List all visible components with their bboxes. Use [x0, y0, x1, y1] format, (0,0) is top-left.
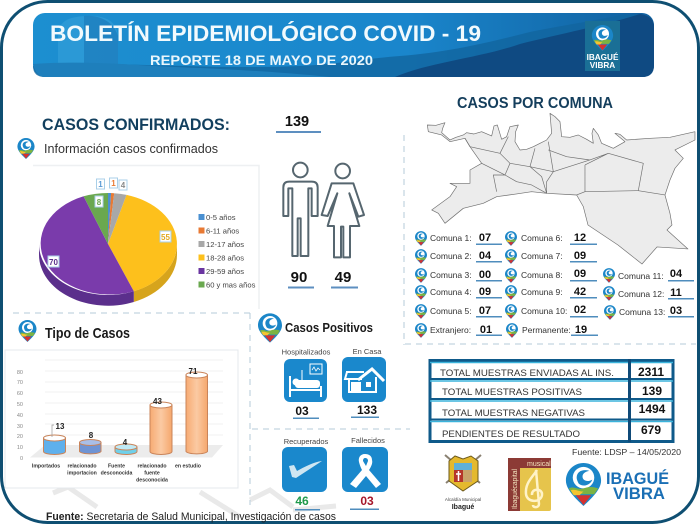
comuna values: 09 [479, 286, 491, 298]
comuna labels: Comuna 6: [521, 233, 563, 243]
y axis: 70 [17, 380, 23, 386]
y axis: 40 [17, 413, 23, 419]
info casos confirmados text: Información casos confirmados [44, 142, 218, 156]
category labels: Fuente [108, 464, 125, 470]
banner decoration [58, 16, 118, 77]
comuna values: 01 [480, 324, 492, 336]
logo: alcaldia ibague: Ibagué [452, 504, 474, 511]
title: BOLETÍN EPIDEMIOLÓGICO COVID - 19 [50, 21, 481, 46]
y axis [17, 370, 23, 462]
banner logo: VIBRA [590, 61, 615, 70]
pie legend [198, 213, 256, 290]
female count: 49 [335, 269, 351, 286]
tile: hospitalizados: 03 [295, 404, 309, 418]
category labels [32, 464, 201, 484]
comuna values: 07 [479, 305, 491, 317]
comuna values: 19 [575, 324, 587, 336]
table labels [440, 368, 614, 439]
value labels: 13 [56, 422, 65, 431]
comuna labels: Permanente: [522, 325, 571, 335]
logo: alcaldia ibague [445, 455, 481, 511]
icon: people figures [283, 163, 364, 257]
tile: fallecidos [342, 436, 388, 510]
banner [33, 13, 654, 77]
table values [638, 365, 666, 437]
panel: cylinder chart [5, 350, 238, 488]
category labels: Importados [32, 464, 60, 470]
logo: ibague vibra [566, 463, 669, 506]
source note: Fuente: Secretaria de Salud Municipal, Investigación de casos [46, 511, 336, 523]
pie data labels: 70 [49, 258, 58, 267]
comuna values: 02 [574, 304, 586, 316]
pie legend: 18-28 años [206, 254, 244, 262]
pie legend: 29-59 años [206, 267, 244, 276]
tile: fallecidos: 03 [360, 494, 374, 508]
pie data labels: 8 [97, 198, 102, 207]
logo: alcaldia ibague: Alcaldía Municipal [445, 497, 481, 502]
heading: casos confirmados: CASOS CONFIRMADOS: [42, 115, 230, 134]
category labels: relacionado [137, 464, 167, 470]
comuna labels: Comuna 8: [521, 270, 563, 280]
banner logo: IBAGUÉ [587, 52, 619, 62]
pie slice: 12-17 [108, 193, 126, 244]
y axis: 60 [17, 391, 23, 397]
table labels: TOTAL MUESTRAS NEGATIVAS [442, 408, 585, 418]
cylinder: fuente desconocida [115, 444, 137, 454]
pie slice: 0-5 [108, 193, 111, 244]
category labels: desconocida [101, 470, 132, 476]
table labels: TOTAL MUESTRAS ENVIADAS AL INS. [440, 368, 614, 378]
male count: 90 [291, 269, 307, 286]
y axis: 10 [17, 445, 23, 451]
pie data labels: 4 [121, 181, 126, 190]
logo: ibague vibra: IBAGUÉ [606, 469, 669, 488]
y axis: 80 [17, 370, 23, 376]
table values: 679 [641, 423, 661, 437]
logo: musical: Ibaguécapital [512, 469, 519, 509]
icon: hospital bed [290, 364, 322, 397]
y axis: 50 [17, 402, 23, 408]
icon: house [345, 369, 384, 392]
comuna labels: Comuna 3: [430, 270, 472, 280]
pie data labels [48, 178, 171, 267]
background watermark stripes [53, 487, 336, 517]
treble clef mark [526, 470, 542, 507]
heading: casos positivos: Casos Positivos [285, 321, 373, 335]
subtitle: REPORTE 18 DE MAYO DE 2020 [150, 52, 373, 68]
tile: hospitalizados: Hospitalizados [282, 348, 331, 356]
pie slice: 29-59 [41, 196, 134, 295]
comuna labels: Comuna 12: [618, 289, 664, 299]
table: muestras [430, 359, 673, 442]
tile: en casa: 133 [357, 403, 377, 417]
comuna labels: Comuna 1: [430, 233, 472, 243]
cylinder: importados [44, 435, 66, 454]
icon: pin info [17, 138, 35, 159]
comuna values: 12 [574, 232, 586, 244]
value labels: 71 [189, 367, 198, 376]
value labels: 8 [89, 431, 94, 440]
pie data labels: 1 [111, 179, 116, 188]
y axis: 20 [17, 434, 23, 440]
comuna values: 42 [574, 286, 586, 298]
cylinder: relacionado importacion [80, 440, 101, 454]
value labels [52, 367, 198, 447]
y axis: 0 [20, 456, 23, 462]
category labels: fuente [144, 470, 160, 476]
logo: musical [508, 458, 551, 511]
comuna values: 03 [670, 305, 682, 317]
comuna labels: Comuna 2: [430, 251, 472, 261]
logo: ibague vibra: VIBRA [613, 484, 665, 503]
comuna labels: Comuna 13: [619, 307, 665, 317]
comuna labels: Comuna 11: [618, 271, 664, 281]
table labels: PENDIENTES DE RESULTADO [442, 429, 580, 439]
category labels: importacion [67, 470, 97, 476]
comuna labels: Comuna 5: [430, 306, 472, 316]
total confirmed number [276, 114, 321, 133]
comuna values: 07 [479, 232, 491, 244]
comuna labels: Comuna 9: [521, 287, 563, 297]
source: LDSP: Fuente: LDSP – 14/05/2020 [572, 447, 681, 457]
icon: ribbon [350, 454, 381, 488]
icon: pin tipo de casos [18, 320, 36, 342]
icon: pin casos positivos [258, 313, 282, 343]
tile: recuperados: Recuperados [284, 437, 329, 446]
pie legend: 0-5 años [206, 213, 236, 222]
map of comunas [427, 113, 695, 264]
comuna labels: Extranjero: [430, 325, 471, 335]
comuna values: 00 [479, 269, 491, 281]
pie data labels: 1 [98, 180, 103, 189]
category labels: relacionado [67, 464, 97, 470]
table values: 139 [642, 384, 662, 398]
y axis: 30 [17, 424, 23, 430]
pie data labels: 55 [161, 233, 170, 242]
pie slice: 6-11 [108, 193, 114, 244]
tile: recuperados: 46 [295, 494, 309, 508]
comunas list [415, 231, 694, 338]
category labels: desconocida [136, 478, 168, 484]
pie legend: 60 y mas años [206, 280, 256, 290]
male count [288, 269, 314, 288]
pie slice: 18-28 [108, 195, 177, 291]
logo: musical: musical [527, 461, 551, 468]
dashed dividers [13, 135, 696, 505]
comuna values: 11 [670, 287, 682, 299]
tile: en casa: En Casa [353, 347, 382, 356]
comuna labels: Comuna 7: [521, 251, 563, 261]
tile: hospitalizados [282, 348, 331, 419]
category labels: en estudio [175, 464, 201, 470]
comuna labels: Comuna 10: [521, 306, 567, 316]
pie slice: 60+ [84, 193, 108, 244]
total confirmed number: 139 [285, 114, 309, 130]
comuna pins [415, 231, 616, 338]
comuna values [479, 232, 683, 336]
comuna values: 09 [574, 268, 586, 280]
tile: recuperados [282, 437, 329, 510]
heading: tipo de casos: Tipo de Casos [45, 325, 130, 342]
pie sides [134, 244, 177, 302]
table values: 2311 [638, 365, 664, 379]
table rules [430, 359, 673, 442]
tile: en casa [342, 347, 386, 418]
heading: casos por comuna: CASOS POR COMUNA [457, 95, 613, 112]
comuna values: 09 [574, 250, 586, 262]
comuna values: 04 [670, 268, 683, 280]
cylinder: relacionado fuente desconocida [150, 402, 172, 454]
table labels: TOTAL MUESTRAS POSITIVAS [442, 387, 582, 397]
comuna values: 04 [479, 250, 492, 262]
pie legend: 6-11 años [206, 226, 239, 236]
comuna labels [430, 233, 665, 335]
comuna underlines [476, 244, 694, 336]
tile: fallecidos: Fallecidos [351, 436, 385, 445]
cylinder: en estudio [186, 372, 208, 454]
female count [331, 269, 358, 288]
comuna labels: Comuna 4: [430, 287, 472, 297]
table values: 1494 [639, 402, 666, 416]
icon: check [289, 461, 322, 478]
value labels: 4 [123, 438, 128, 447]
value labels: 43 [153, 397, 162, 406]
panel: pie chart [33, 166, 259, 309]
chart grid and floor [30, 445, 223, 458]
pie legend: 12-17 años [206, 240, 244, 249]
banner logo [585, 21, 620, 71]
